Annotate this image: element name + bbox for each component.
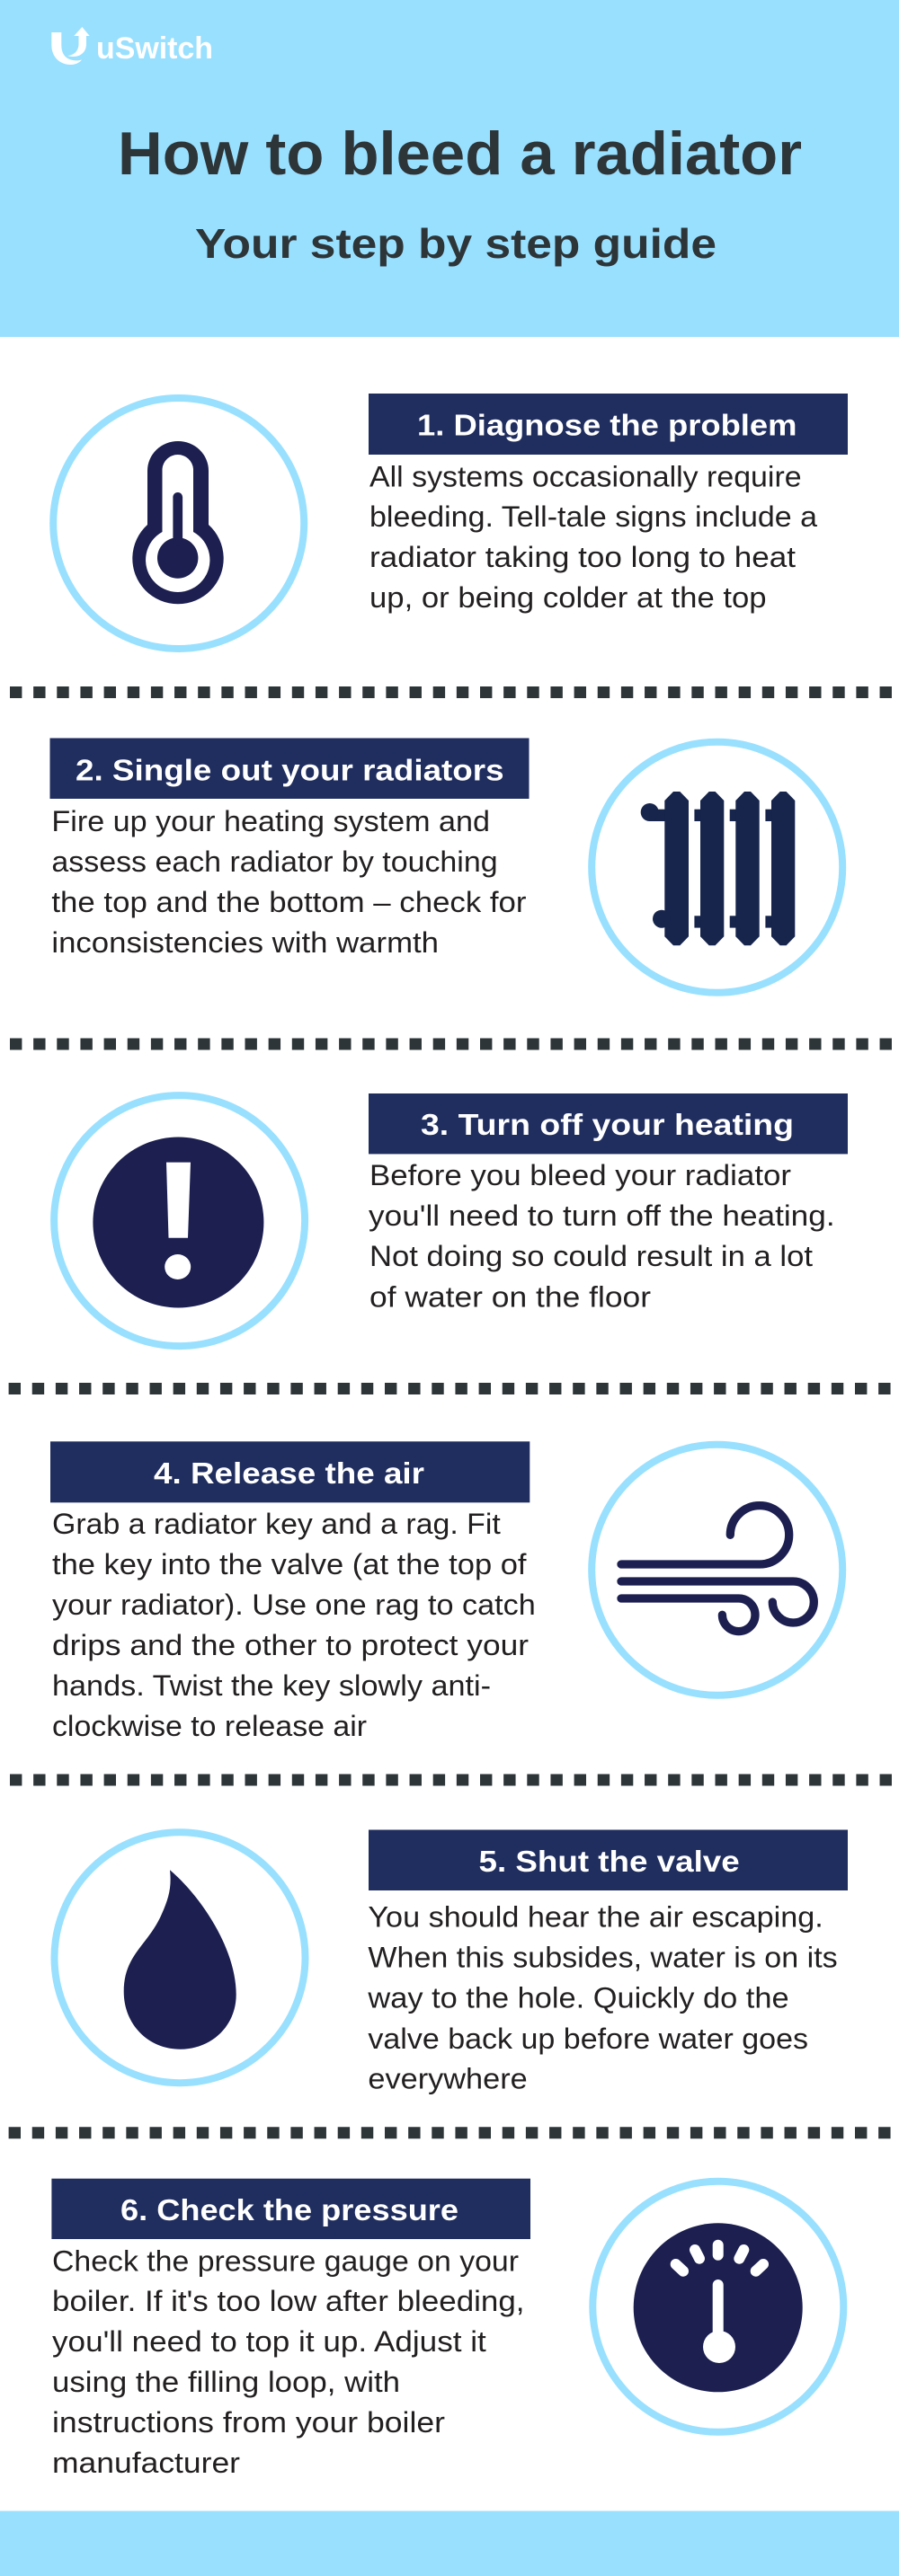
panel: step 4 release the air xyxy=(50,1441,842,1742)
text block: step 6: instructions from your boiler xyxy=(52,2406,445,2439)
subtitle: Your step by step guide xyxy=(195,220,717,267)
icon: warning exclamation xyxy=(54,1095,305,1346)
text block: step 2: Fire up your heating system and xyxy=(51,805,490,837)
text block: step 1: All systems occasionally require xyxy=(369,460,802,492)
text block: step 4: clockwise to release air xyxy=(52,1710,367,1742)
heading: step 6: 6. Check the pressure xyxy=(120,2193,458,2226)
icon: wind xyxy=(592,1445,842,1695)
text block: step 6: Check the pressure gauge on your xyxy=(52,2244,519,2277)
text block: step 1 xyxy=(369,460,817,614)
icon: pressure gauge xyxy=(592,2182,843,2432)
icon: water drop xyxy=(54,1832,306,2083)
icon: thermometer xyxy=(53,398,304,649)
text block: step 6: using the filling loop, with xyxy=(52,2366,400,2398)
logo: uSwitch xyxy=(51,27,213,66)
panel: step 2 single out your radiators xyxy=(50,739,842,993)
text block: step 2: the top and the bottom – check for xyxy=(51,886,527,918)
text block: step 4: your radiator). Use one rag to catch xyxy=(52,1589,536,1621)
text block: step 1: up, or being colder at the top xyxy=(369,581,767,614)
text block: step 5 xyxy=(367,1901,838,2095)
heading: step 5 xyxy=(369,1829,848,1890)
text block: step 2 xyxy=(51,805,527,959)
heading: step 1 xyxy=(369,394,848,455)
text block: step 3: you'll need to turn off the heating. xyxy=(369,1199,835,1232)
header band xyxy=(0,0,899,337)
panel: step 5 shut the valve xyxy=(54,1829,848,2095)
logo wordmark: uSwitch xyxy=(96,31,213,66)
text block: step 5: valve back up before water goes xyxy=(368,2023,808,2055)
text block: step 4: drips and the other to protect your xyxy=(52,1629,529,1661)
footer band xyxy=(0,2511,899,2576)
text block: step 2: assess each radiator by touching xyxy=(51,845,498,878)
heading: step 6 xyxy=(51,2179,530,2239)
heading: step 1: 1. Diagnose the problem xyxy=(417,408,797,441)
heading: step 5: 5. Shut the valve xyxy=(478,1845,740,1878)
heading: step 2: 2. Single out your radiators xyxy=(76,753,504,786)
heading: step 3: 3. Turn off your heating xyxy=(421,1108,794,1141)
heading: step 3 xyxy=(369,1093,848,1154)
text block: step 1: bleeding. Tell-tale signs include a xyxy=(369,500,817,533)
text block: step 5: way to the hole. Quickly do the xyxy=(367,1982,789,2014)
text block: step 6: manufacturer xyxy=(52,2447,240,2479)
text block: step 4: hands. Twist the key slowly anti- xyxy=(52,1669,491,1702)
text block: step 3: Not doing so could result in a lot xyxy=(369,1240,813,1272)
text block: step 3 xyxy=(369,1159,835,1313)
text block: step 4: Grab a radiator key and a rag. Fit xyxy=(52,1508,501,1540)
text block: step 3: of water on the floor xyxy=(369,1280,651,1313)
text block: step 5: everywhere xyxy=(368,2063,528,2095)
text block: step 2: inconsistencies with warmth xyxy=(51,926,439,959)
heading: step 4: 4. Release the air xyxy=(154,1456,424,1490)
text block: step 5: You should hear the air escaping. xyxy=(368,1901,823,1934)
panel: step 3 turn off your heating xyxy=(54,1093,848,1346)
text block: step 4: the key into the valve (at the top of xyxy=(52,1548,527,1580)
text block: step 3: Before you bleed your radiator xyxy=(369,1159,791,1191)
text block: step 1: radiator taking too long to heat xyxy=(369,541,796,573)
icon: U with up arrow xyxy=(51,27,90,65)
text block: step 6: boiler. If it's too low after bleeding, xyxy=(52,2285,525,2317)
text block: step 5: When this subsides, water is on its xyxy=(368,1942,838,1974)
panel: step 6 check the pressure xyxy=(51,2179,843,2479)
panel: step 1 diagnose the problem xyxy=(53,394,848,649)
text block: step 6: you'll need to top it up. Adjust it xyxy=(52,2325,486,2358)
text block: step 6 xyxy=(52,2244,525,2479)
title: How to bleed a radiator xyxy=(118,120,802,188)
text block: step 4 xyxy=(52,1508,536,1742)
heading: step 2 xyxy=(50,739,529,799)
heading: step 4 xyxy=(50,1441,530,1502)
icon: radiator xyxy=(592,742,842,993)
